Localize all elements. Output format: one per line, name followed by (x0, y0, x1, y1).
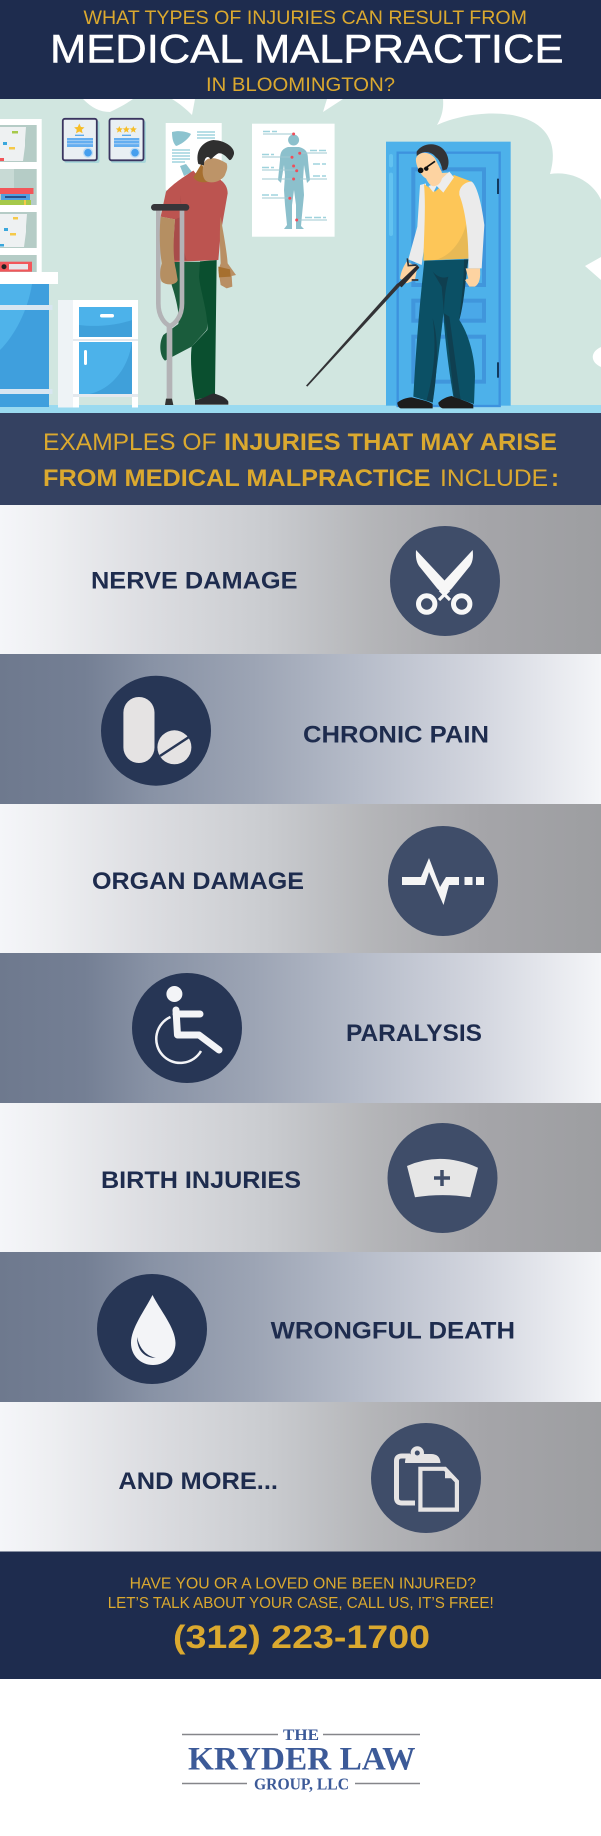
person with crutch (151, 140, 236, 405)
heading line two: INCLUDE (440, 465, 548, 492)
heading line one: INJURIES THAT MAY ARISE (224, 429, 557, 456)
icon: nurse cap (388, 1123, 498, 1233)
panel: paralysis (0, 953, 601, 1103)
title: medical malpractice: MEDICAL MALPRACTICE (50, 28, 564, 72)
logo: the kryder law group (182, 1727, 420, 1793)
logo name: kryder law: KRYDER LAW (188, 1742, 416, 1778)
panel: and more (0, 1402, 601, 1552)
logo word: the: THE (283, 1727, 319, 1744)
icon: clipboard (371, 1423, 481, 1533)
counter with blue cabinet (0, 272, 58, 407)
panel: wrongful death (0, 1252, 601, 1402)
icon: scissors (390, 526, 500, 636)
shelving unit (0, 119, 42, 272)
floor (0, 405, 601, 413)
person with white cane (306, 144, 484, 408)
logo word: group llc: GROUP, LLC (254, 1774, 349, 1793)
text: question: HAVE YOU OR A LOVED ONE BEEN INJURED? (130, 1576, 476, 1593)
label: AND MORE... (118, 1468, 278, 1495)
heading line two: FROM MEDICAL MALPRACTICE (43, 465, 430, 492)
certificate three stars (110, 119, 146, 163)
heading: in bloomington: IN BLOOMINGTON? (206, 74, 395, 96)
panel: nerve damage (0, 505, 601, 654)
poster: body chart (252, 124, 335, 237)
panel: call to action (0, 1552, 601, 1679)
blue door (386, 142, 511, 406)
phone number: (312) 223-1700 (173, 1619, 430, 1655)
heading line one (43, 429, 557, 456)
heading line two: : (551, 465, 559, 492)
poster: organs chart (166, 123, 222, 190)
certificate one star (63, 119, 100, 163)
label: CHRONIC PAIN (303, 721, 489, 748)
heading: what types of injuries: WHAT TYPES OF INJURIES CAN RESULT FROM (84, 7, 527, 29)
label: ORGAN DAMAGE (92, 868, 304, 895)
panel: header (0, 0, 601, 99)
side cabinet (58, 300, 138, 408)
panel: chronic pain (0, 654, 601, 804)
panel: clinic illustration (0, 99, 601, 413)
panel: examples heading (0, 413, 601, 505)
icon: pills (101, 676, 211, 786)
icon: heartbeat (388, 826, 498, 936)
text: call us: LET’S TALK ABOUT YOUR CASE, CALL US, IT’S FREE! (108, 1595, 494, 1612)
heading line one: EXAMPLES OF (43, 429, 217, 456)
icon: drop (97, 1274, 207, 1384)
panel: organ damage (0, 804, 601, 953)
panel: birth injuries (0, 1103, 601, 1252)
wall cloud backdrop (0, 99, 601, 405)
label: WRONGFUL DEATH (271, 1317, 515, 1344)
label: PARALYSIS (346, 1020, 482, 1047)
label: BIRTH INJURIES (101, 1167, 301, 1194)
label: NERVE DAMAGE (91, 567, 298, 594)
icon: wheelchair (132, 973, 242, 1083)
